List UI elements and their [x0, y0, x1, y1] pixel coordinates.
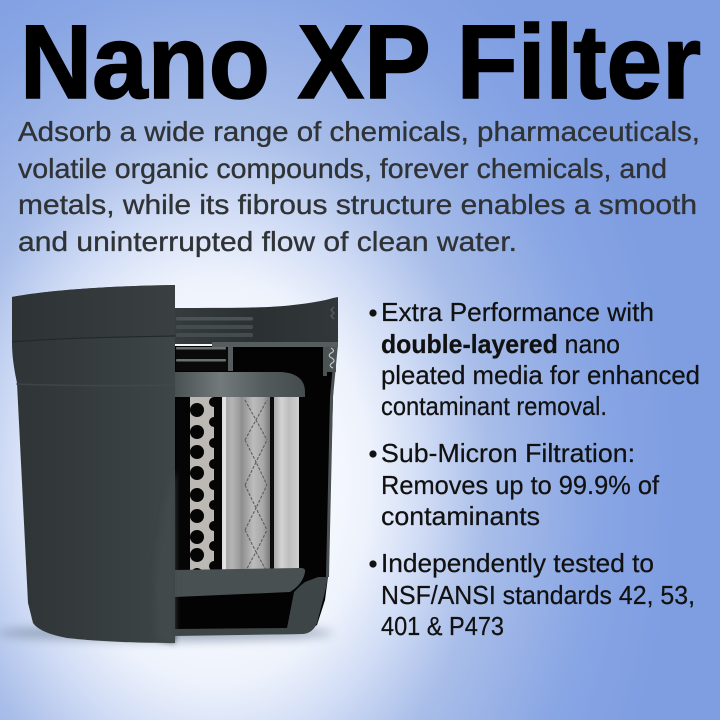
filter cutaway illustration: [12, 285, 338, 643]
bullet: extra performance: pleated media for enhanced: [381, 360, 700, 390]
intro paragraph: Adsorb a wide range of chemicals, pharmaceuticals,: [18, 116, 700, 147]
pleated filter media: [222, 395, 299, 573]
bullet: sub-micron filtration: Sub-Micron Filtration:: [381, 438, 635, 468]
bullet: extra performance: [370, 297, 700, 421]
bullet: sub-micron filtration: [370, 438, 660, 531]
top end cap: [175, 372, 305, 397]
filter housing interior: [175, 297, 338, 636]
feature bullet list: [370, 297, 700, 641]
intro paragraph: and uninterrupted flow of clean water.: [18, 226, 517, 257]
bullet: sub-micron filtration: Removes up to 99.9% of: [381, 470, 660, 500]
bullet: extra performance: double-layered nano: [381, 329, 620, 359]
title: Nano XP Filter: [20, 4, 701, 121]
bullet: independently tested: [370, 548, 695, 641]
intro paragraph: metals, while its fibrous structure enables a smooth: [18, 189, 697, 220]
intro paragraph: volatile organic compounds, forever chemicals, and: [18, 153, 667, 184]
outer shell cutaway: [12, 285, 175, 643]
bullet: extra performance: Extra Performance with: [381, 297, 654, 327]
threaded neck ridges: [176, 317, 253, 371]
bullet: independently tested: NSF/ANSI standards 42, 53,: [381, 580, 695, 610]
bottom end cap: [175, 568, 305, 597]
ground shadow: [0, 625, 333, 641]
bullet: extra performance: contaminant removal.: [381, 391, 607, 421]
bullet: sub-micron filtration: contaminants: [381, 501, 540, 531]
intro paragraph: [18, 116, 700, 257]
thread teeth on rim: [329, 307, 334, 368]
perforated inner core: [176, 395, 222, 580]
bullet: independently tested: 401 & P473: [381, 611, 504, 641]
bullet: independently tested: Independently tested to: [381, 548, 654, 578]
